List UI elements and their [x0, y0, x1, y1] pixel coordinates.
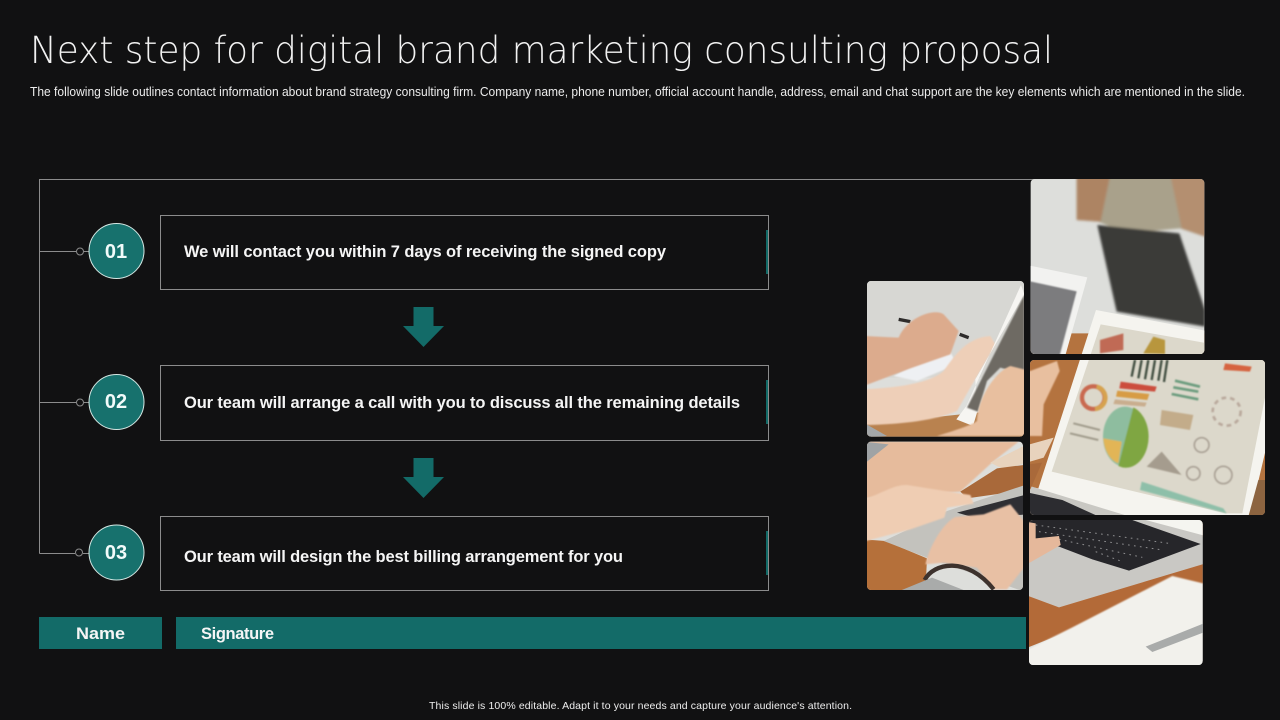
tablet — [956, 285, 1024, 426]
lower desk — [867, 540, 927, 590]
step 2 badge — [89, 374, 144, 430]
white lid edge — [1146, 520, 1206, 536]
desk wedge — [960, 463, 1042, 498]
footer note: This slide is 100% editable. Adapt it to your needs and capture your audience's attention. — [429, 700, 852, 712]
lower sleeve — [902, 578, 964, 590]
left-hand tiles: tablet users — [864, 278, 1060, 593]
white papers — [894, 353, 954, 381]
tablet in background — [1027, 265, 1087, 357]
signature bar: Signature — [201, 625, 274, 643]
step 3 box — [160, 516, 768, 590]
bracelet — [925, 566, 994, 589]
step 1 — [89, 216, 768, 290]
step 2 box: Our team will arrange a call with you to discuss all the remaining details — [184, 394, 740, 412]
wood below laptop — [1026, 563, 1206, 648]
step 1 box — [160, 216, 768, 290]
step 3 badge — [89, 525, 144, 580]
step 1 badge — [89, 224, 144, 278]
typing left hand — [864, 485, 974, 542]
step 2 badge: 02 — [105, 391, 127, 413]
laptop screen — [1052, 324, 1273, 513]
photo collage: laptop and tablet on desk — [860, 170, 1280, 670]
wall and table — [860, 170, 1280, 670]
key highlights — [1036, 525, 1169, 562]
step 3 — [89, 516, 768, 590]
laptop lid — [1028, 310, 1280, 517]
silver base — [1026, 520, 1206, 607]
lower tile: keyboard and paper — [1026, 520, 1206, 668]
keyboard — [1026, 520, 1201, 571]
step 2 box — [160, 366, 768, 440]
step 3 box: Our team will design the best billing arrangement for you — [184, 548, 623, 566]
front arm — [864, 336, 995, 425]
notebook — [990, 438, 1054, 469]
sleeve — [867, 424, 887, 437]
step 3 badge: 03 — [105, 542, 127, 564]
laptop hinge and keys in centre tile — [1030, 486, 1124, 515]
name bar: Name — [76, 625, 125, 643]
keyboard keys — [957, 496, 1023, 516]
upper sleeve — [867, 442, 888, 462]
arrow 1 — [403, 307, 444, 347]
pen — [1146, 623, 1206, 652]
signature bar — [176, 617, 1026, 649]
name bar — [39, 617, 162, 649]
title: Next step for digital brand marketing consulting proposal — [30, 29, 1053, 72]
step 1 badge: 01 — [105, 241, 127, 263]
pen — [899, 319, 969, 338]
subtitle: The following slide outlines contact information about brand strategy consulting firm. Company name, phone number, official account handle, address, email and chat support are the key elements which are mentioned in the slide. — [30, 85, 1245, 99]
front hand — [937, 361, 1060, 436]
wood corner — [1248, 480, 1265, 515]
step 2 — [89, 366, 768, 440]
dashboard charts — [1070, 333, 1252, 513]
back hand — [864, 312, 959, 386]
step 1 box: We will contact you within 7 days of receiving the signed copy — [184, 243, 667, 261]
arrow 2 — [403, 458, 444, 498]
grey wall — [867, 281, 1024, 285]
typing right hand — [924, 504, 1023, 590]
typing finger — [1029, 522, 1061, 563]
forearm — [864, 442, 1019, 498]
standing person — [1077, 173, 1210, 327]
wood desk — [867, 412, 1024, 437]
trackpad — [884, 484, 1027, 593]
paper — [1026, 576, 1206, 668]
connector frame — [40, 180, 1035, 556]
